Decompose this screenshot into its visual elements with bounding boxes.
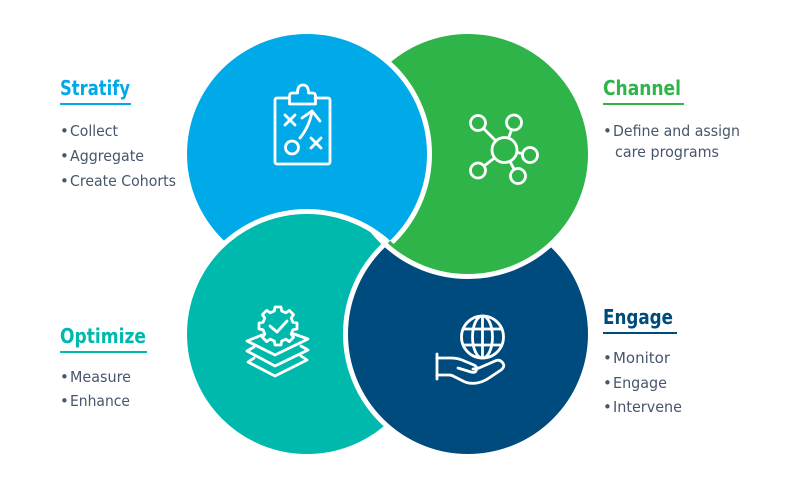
underline — [603, 103, 684, 105]
text block: Stratify — [60, 76, 176, 190]
list — [603, 349, 682, 416]
text block: Channel — [603, 76, 740, 161]
list: care programs — [615, 143, 719, 161]
list: • — [60, 147, 69, 165]
list: • — [603, 398, 612, 416]
circle: blue — [187, 34, 427, 274]
icon: clipboard play diagram — [275, 85, 330, 164]
list: • — [603, 374, 612, 392]
list: Create Cohorts — [70, 172, 176, 190]
circle: teal — [184, 212, 430, 456]
text block: Optimize — [60, 324, 147, 410]
list: Define and assign — [613, 122, 740, 140]
list: Monitor — [613, 349, 671, 367]
white edge: teal over blue at the junction — [340, 216, 388, 242]
text block: Engage — [603, 305, 682, 416]
list — [60, 122, 176, 190]
list: Collect — [70, 122, 118, 140]
list — [603, 122, 740, 161]
list: • — [60, 172, 69, 190]
circle: blue overlap on green — [343, 62, 432, 244]
icon: gear with stacked layers — [247, 307, 308, 376]
list: • — [60, 392, 69, 410]
icon: network hub — [470, 115, 538, 184]
list: Intervene — [613, 398, 682, 416]
four overlapping circles — [184, 32, 590, 456]
list: • — [60, 368, 69, 386]
list: Aggregate — [70, 147, 144, 165]
circle: green — [346, 32, 590, 276]
icon: hand holding globe — [437, 316, 504, 383]
heading: Engage: Engage — [603, 305, 673, 329]
list: Engage — [613, 374, 667, 392]
heading: Optimize: Optimize — [60, 324, 146, 348]
list: • — [60, 122, 69, 140]
circle: navy — [346, 212, 590, 456]
heading: Channel: Channel — [603, 76, 681, 100]
list: Enhance — [70, 392, 130, 410]
list: • — [603, 122, 612, 140]
list: • — [603, 349, 612, 367]
list — [60, 368, 131, 410]
list: Measure — [70, 368, 131, 386]
heading: Stratify: Stratify — [60, 76, 130, 100]
underline — [60, 103, 131, 105]
underline — [60, 351, 147, 353]
underline — [603, 332, 677, 334]
